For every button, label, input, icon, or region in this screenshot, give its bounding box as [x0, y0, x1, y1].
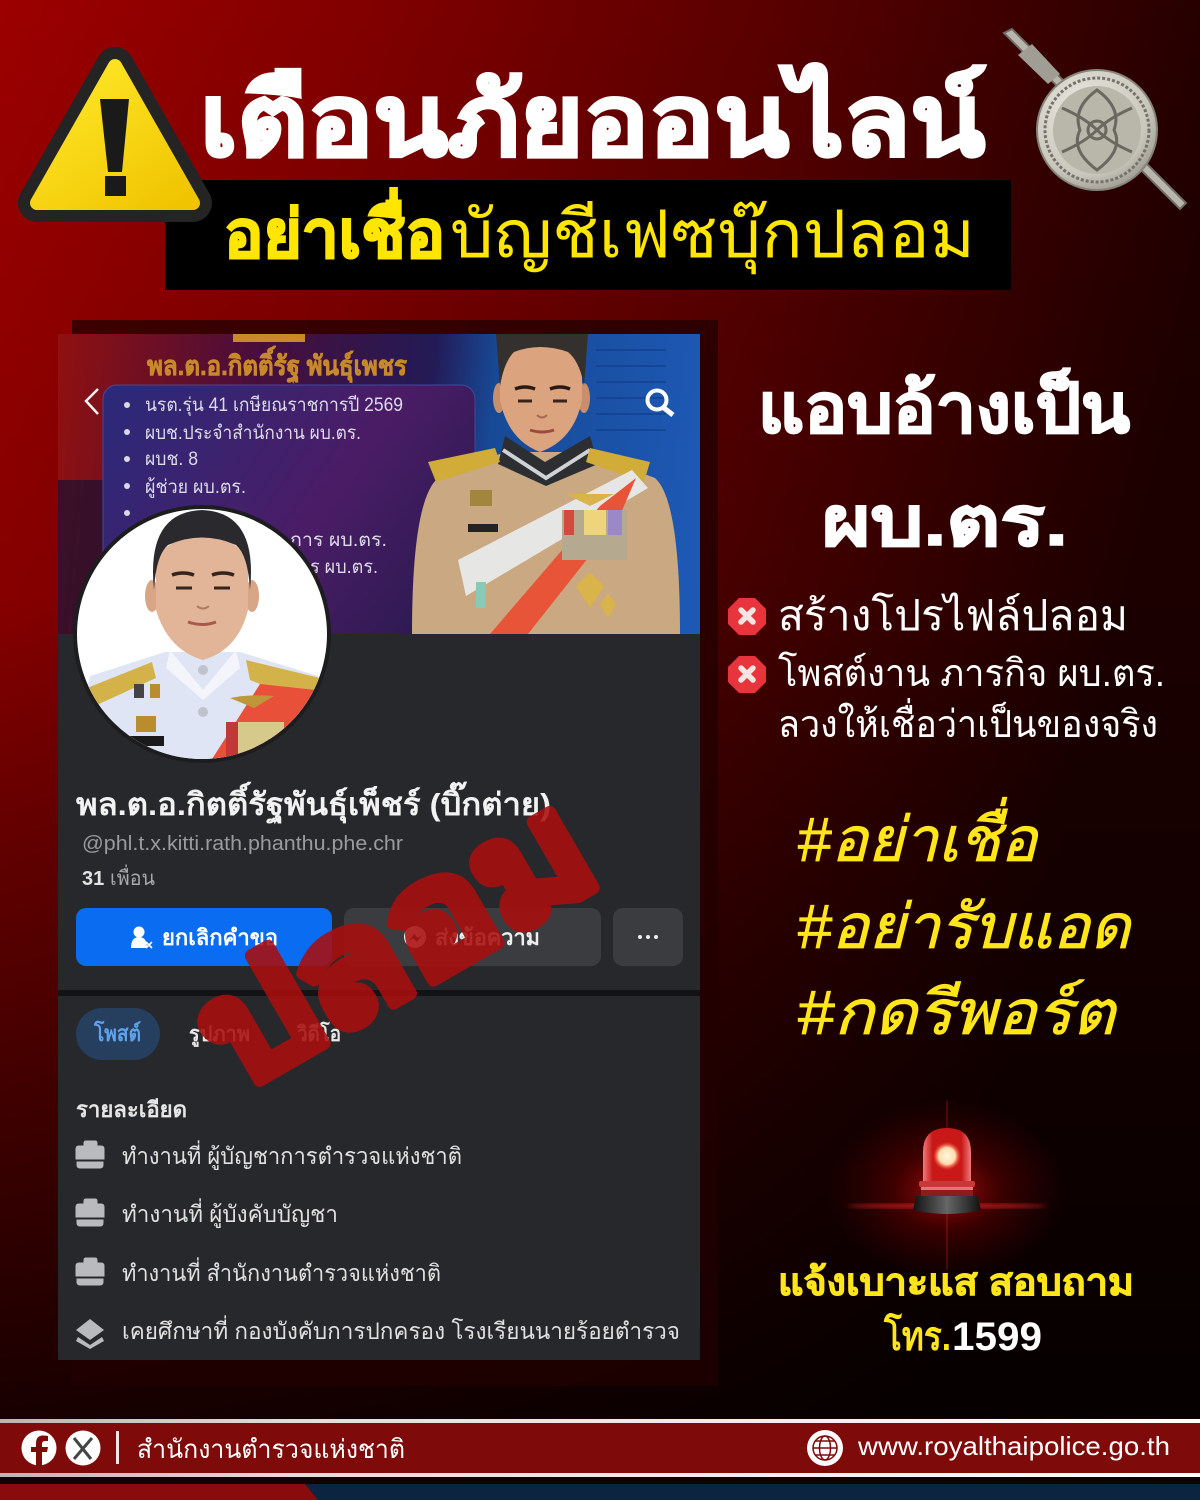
icon: warning triangle [37, 66, 193, 203]
tab: videos: วิดีโอ [296, 1021, 341, 1046]
details list: ทำงานที่ สำนักงานตำรวจแห่งชาติ [122, 1257, 441, 1286]
footer: website: www.royalthaipolice.go.th [857, 1431, 1170, 1461]
hotline: 1599 [952, 1315, 1042, 1359]
hotline: โทร. [883, 1313, 951, 1359]
hotline: แจ้งเบาะแส สอบถาม [778, 1262, 1134, 1304]
icon: red siren [827, 1100, 1067, 1280]
hashtags: #อย่ารับแอด [797, 893, 1133, 962]
cover: career list: การ ผบ.ตร. [290, 530, 387, 551]
friend count: เพื่อน [110, 864, 155, 890]
icon: briefcase [76, 1141, 104, 1168]
subtitle bar: อย่าเชื่อ [224, 187, 445, 271]
icon: back chevron [86, 389, 98, 414]
hashtags: #กดรีพอร์ต [797, 979, 1118, 1048]
button: send message [344, 908, 601, 966]
button: cancel request: ยกเลิกคำขอ [162, 925, 278, 950]
details heading: รายละเอียด [76, 1097, 187, 1122]
details list: ทำงานที่ ผู้บังคับบัญชา [122, 1198, 338, 1228]
cover: gold heading [147, 330, 407, 384]
warning item: fake posts: โพสต์งาน ภารกิจ ผบ.ตร. [778, 651, 1165, 695]
icon: X [66, 1430, 100, 1466]
details list: เคยศึกษาที่ กองบังคับการปกครอง โรงเรียนนายร้อยตำรวจ [122, 1315, 680, 1344]
cover: career list: ผบช.ประจำสำนักงาน ผบ.ตร. [145, 423, 361, 444]
icon: briefcase [76, 1258, 104, 1285]
warning item: fake posts: ลวงให้เชื่อว่าเป็นของจริง [778, 698, 1158, 746]
cover: officer photo [412, 334, 680, 634]
cover: shutter stripes [596, 350, 666, 430]
profile picture [73, 505, 331, 770]
tab: posts [76, 1008, 160, 1060]
title: เตือนภัยออนไลน์ [200, 64, 985, 177]
button: send message: ส่งข้อความ [435, 925, 540, 950]
hotline [778, 1262, 1134, 1359]
footer [0, 1418, 1200, 1500]
icon: globe [807, 1430, 843, 1466]
details list: ทำงานที่ ผู้บัญชาการตำรวจแห่งชาติ [122, 1140, 462, 1170]
warning item: fake profile: สร้างโปรไฟล์ปลอม [778, 591, 1128, 639]
icon: briefcase [76, 1199, 104, 1226]
profile name: พล.ต.อ.กิตติ์รัฐพันธุ์เพ็ชร์ (บิ๊กต่าย) [76, 781, 551, 825]
hashtags [797, 797, 1133, 1048]
panel: fake Facebook profile [58, 330, 700, 1360]
friend count: 31 [82, 868, 104, 890]
cover: career list [103, 385, 475, 645]
tab: photos: รูปภาพ [189, 1023, 250, 1048]
details list [76, 1140, 680, 1349]
subtitle bar: บัญชีเฟซบุ๊กปลอม [450, 197, 975, 275]
footer: agency name: สำนักงานตำรวจแห่งชาติ [137, 1434, 405, 1464]
friend count [82, 864, 155, 890]
username: @phl.t.x.kitti.rath.phanthu.phe.chr [82, 833, 403, 855]
stamp: fake: ปลอม [168, 762, 620, 1120]
hashtags: #อย่าเชื่อ [797, 797, 1040, 875]
cover: career list: ผู้ช่วย ผบ.ตร. [145, 477, 246, 498]
subtitle bar [165, 180, 1011, 290]
warning item: fake posts [728, 651, 1165, 746]
cover: gold heading: พล.ต.อ.กิตติ์รัฐ พันธุ์เพชร [147, 346, 407, 384]
cover: career list: ผบช. 8 [145, 449, 198, 470]
button: more [613, 908, 683, 966]
button: cancel request [76, 908, 332, 966]
icon: police emblem with sword [1004, 29, 1186, 209]
panel shadow [72, 320, 718, 1386]
icon: search [648, 390, 673, 415]
icon: graduation cap [76, 1319, 104, 1349]
icon: facebook [22, 1430, 56, 1466]
heading: impersonation: แอบอ้างเป็น [758, 368, 1130, 447]
heading: impersonation [758, 368, 1130, 560]
cover photo [58, 330, 700, 645]
heading: impersonation: ผบ.ตร. [822, 484, 1068, 560]
cover: career list: ร ผบ.ตร. [310, 557, 378, 578]
tab: posts: โพสต์ [93, 1020, 141, 1046]
cover: career list: นรต.รุ่น 41 เกษียณราชการปี 2569 [145, 394, 403, 417]
